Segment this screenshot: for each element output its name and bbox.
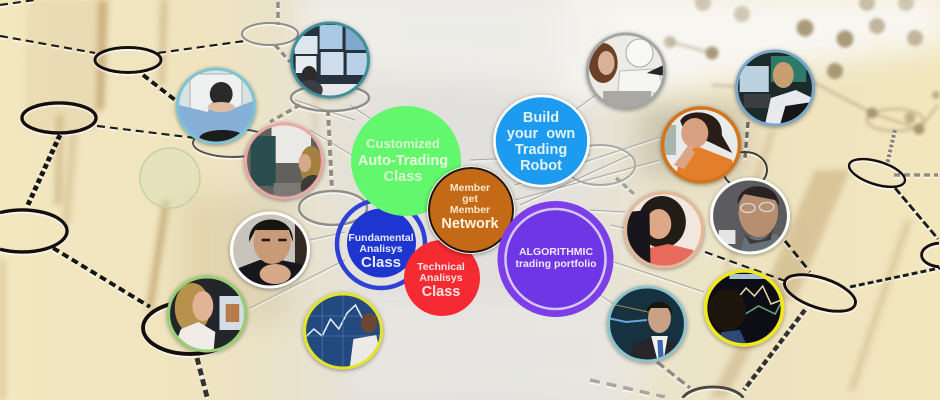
- avatar: young man, white ring: [228, 210, 312, 290]
- avatar: woman with laptop, peach ring: [622, 190, 706, 270]
- top-right blurred dot network: [664, 0, 940, 134]
- bubble: Member get Member Network: [428, 166, 514, 254]
- bubble: Fundamental Analisys Class: Fundamental: [348, 232, 414, 244]
- avatar: woman and robot: [584, 31, 668, 111]
- bubble: Technical Analisys Class: Class: [422, 284, 460, 300]
- avatar: presenter at chart, yellow ring: [301, 291, 385, 371]
- bubble: ALGORITHMIC trading portfolio: trading portfolio: [515, 258, 597, 270]
- bubble: Build your own Trading Robot: your own: [507, 126, 575, 142]
- avatar: man watching chart, yellow ring: [702, 268, 786, 348]
- avatar: trader from behind: [733, 48, 817, 128]
- bubble: Customized Auto-Trading Class: [351, 106, 461, 216]
- avatar: blonde woman, green ring: [165, 274, 249, 354]
- bubble: Member get Member Network: Network: [441, 216, 500, 232]
- bubble: Technical Analisys Class: Analisys: [419, 272, 463, 284]
- bubble: Customized Auto-Trading Class: Customized: [366, 136, 440, 151]
- bubble: Build your own Trading Robot: Build: [523, 110, 559, 126]
- bubble: Fundamental Analisys Class: Analisys: [359, 243, 403, 255]
- bubble: Technical Analisys Class: [404, 240, 480, 316]
- avatar: relaxed man: [174, 66, 258, 146]
- bubble: Build your own Trading Robot: Robot: [520, 158, 562, 174]
- avatar: man in suit: [605, 284, 689, 364]
- avatar: woman with monitors, pink ring: [242, 121, 326, 201]
- bubble: ALGORITHMIC trading portfolio: ALGORITHMIC: [519, 246, 593, 258]
- bubble: Fundamental Analisys Class: Class: [361, 254, 401, 271]
- bubble: Build your own Trading Robot: [494, 96, 588, 186]
- avatar: traders at monitors: [288, 20, 372, 100]
- bubble: Member get Member Network: get: [462, 193, 478, 205]
- avatar: man with glasses: [708, 176, 792, 256]
- avatar: woman in orange sari: [659, 105, 743, 185]
- bubble: Technical Analisys Class: Technical: [417, 261, 465, 273]
- bubble: Member get Member Network: Member: [450, 182, 490, 194]
- bubble: Customized Auto-Trading Class: Class: [384, 169, 422, 185]
- bubble: Customized Auto-Trading Class: Auto-Trading: [358, 153, 448, 169]
- bubble: Member get Member Network: Member: [450, 204, 490, 216]
- bubble: Fundamental Analisys Class: [337, 200, 425, 288]
- bubble: ALGORITHMIC trading portfolio: [498, 201, 614, 317]
- bubble: Build your own Trading Robot: Trading: [515, 142, 567, 158]
